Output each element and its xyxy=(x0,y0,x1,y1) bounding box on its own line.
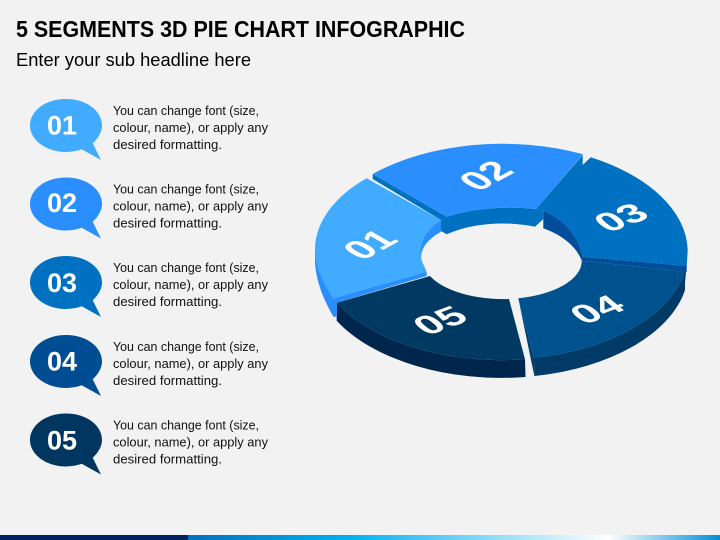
text 03: You can change font (size, xyxy=(113,261,259,275)
text 05: colour, name), or apply any xyxy=(113,436,269,450)
text 01: colour, name), or apply any xyxy=(113,121,269,135)
segment 01: 01 xyxy=(334,224,408,266)
text 05: You can change font (size, xyxy=(113,418,259,432)
number 03: 03 xyxy=(47,268,77,298)
text 02: desired formatting. xyxy=(113,216,222,230)
number 01: 01 xyxy=(47,110,77,140)
text 05: desired formatting. xyxy=(113,452,222,466)
item 02 xyxy=(30,178,269,238)
segment 01 xyxy=(315,178,441,317)
text 04: colour, name), or apply any xyxy=(113,357,269,371)
item 04 xyxy=(30,335,269,396)
subtitle: Enter your sub headline here xyxy=(16,50,251,70)
segment 05 xyxy=(337,276,526,378)
bubble 04 xyxy=(30,335,102,396)
text 02: colour, name), or apply any xyxy=(113,200,269,214)
segment 04: 04 xyxy=(562,290,634,330)
text 01 xyxy=(113,104,269,152)
bubble 02 xyxy=(30,178,102,238)
title: 5 SEGMENTS 3D PIE CHART INFOGRAPHIC xyxy=(16,16,465,42)
text 01: desired formatting. xyxy=(113,138,222,152)
text 01: You can change font (size, xyxy=(113,104,259,118)
text 04 xyxy=(113,340,269,388)
text 03: desired formatting. xyxy=(113,295,222,309)
text 02 xyxy=(113,182,269,230)
segment 03: 03 xyxy=(586,198,658,238)
segment 05: 05 xyxy=(405,301,477,341)
3D donut chart xyxy=(315,144,688,378)
text 02: You can change font (size, xyxy=(113,182,259,196)
segment 03 xyxy=(536,155,688,283)
text 05 xyxy=(113,418,269,466)
text 03: colour, name), or apply any xyxy=(113,278,269,292)
item 05 xyxy=(30,414,269,474)
bubble 03 xyxy=(30,256,102,317)
footer bar xyxy=(0,535,720,540)
segment 02: 02 xyxy=(450,155,524,197)
segment 04 xyxy=(518,261,685,376)
bubble 05 xyxy=(30,414,102,474)
item 03 xyxy=(30,256,269,317)
text 04: desired formatting. xyxy=(113,374,222,388)
segment 02 xyxy=(373,144,583,234)
item 01 xyxy=(30,99,269,160)
bubble 01 xyxy=(30,99,102,160)
number 04: 04 xyxy=(47,346,77,376)
number 05: 05 xyxy=(47,426,77,456)
text 03 xyxy=(113,261,269,309)
text 04: You can change font (size, xyxy=(113,340,259,354)
number 02: 02 xyxy=(47,188,77,218)
